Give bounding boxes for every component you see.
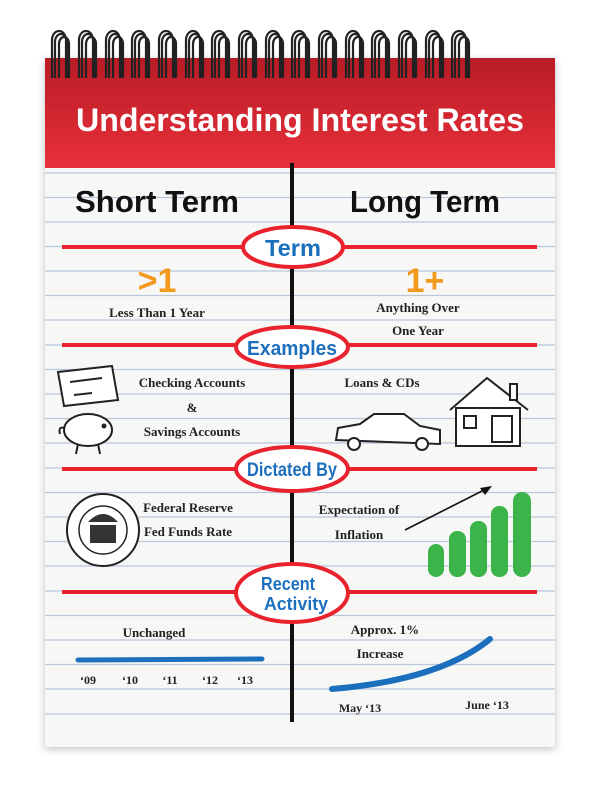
oval: Examples: Examples <box>247 338 337 360</box>
term values: Less Than 1 Year <box>109 305 205 320</box>
oval: Dictated By <box>236 447 348 491</box>
term values: One Year <box>392 323 444 338</box>
oval: Recent Activity: Recent <box>261 574 315 594</box>
chart: increase: May ‘13 <box>339 701 381 715</box>
column headings: Long Term <box>350 184 500 219</box>
chart: unchanged: ‘12 <box>202 673 218 687</box>
chart: increase: Increase <box>357 646 404 661</box>
chart: unchanged: ‘13 <box>237 673 253 687</box>
icon: check <box>58 366 118 406</box>
header band <box>45 58 555 168</box>
title: Understanding Interest Rates <box>76 102 524 138</box>
fed text <box>143 500 400 542</box>
chart: unchanged: ‘11 <box>162 673 178 687</box>
term values <box>109 262 460 338</box>
examples text <box>139 375 420 439</box>
column headings: Short Term <box>75 184 239 219</box>
examples text: Loans & CDs <box>344 375 420 390</box>
chart: unchanged <box>78 625 262 687</box>
red section lines <box>62 247 537 592</box>
fed text: Expectation of <box>319 502 400 517</box>
examples text: Checking Accounts <box>139 375 245 390</box>
icon: piggy bank <box>60 414 112 454</box>
oval: Dictated By: Dictated By <box>247 460 337 481</box>
notebook page <box>45 58 555 747</box>
examples text: Savings Accounts <box>144 424 240 439</box>
bar chart with arrow <box>405 486 531 577</box>
oval: Recent Activity <box>236 564 348 622</box>
examples text: & <box>187 400 198 415</box>
fed text: Federal Reserve <box>143 500 233 515</box>
oval: Term: Term <box>265 235 321 261</box>
term values: Anything Over <box>376 300 460 315</box>
chart: increase <box>332 622 509 715</box>
chart: unchanged: ‘10 <box>122 673 138 687</box>
chart: unchanged: Unchanged <box>123 625 186 640</box>
chart: unchanged: ‘09 <box>80 673 96 687</box>
column headings <box>75 184 500 219</box>
fed text: Inflation <box>335 527 384 542</box>
icon: federal reserve seal <box>67 494 139 566</box>
oval: Term <box>243 227 343 267</box>
icon: house <box>450 378 528 446</box>
oval: Recent Activity: Activity <box>264 594 328 614</box>
spiral binding <box>52 31 469 78</box>
center divider <box>290 163 294 722</box>
icon: car <box>336 414 440 450</box>
oval: Examples <box>236 327 348 367</box>
chart: increase: June ‘13 <box>465 698 509 712</box>
term values: >1 <box>138 262 176 300</box>
fed text: Fed Funds Rate <box>144 524 232 539</box>
chart: increase: Approx. 1% <box>351 622 419 637</box>
term values: 1+ <box>406 262 444 300</box>
